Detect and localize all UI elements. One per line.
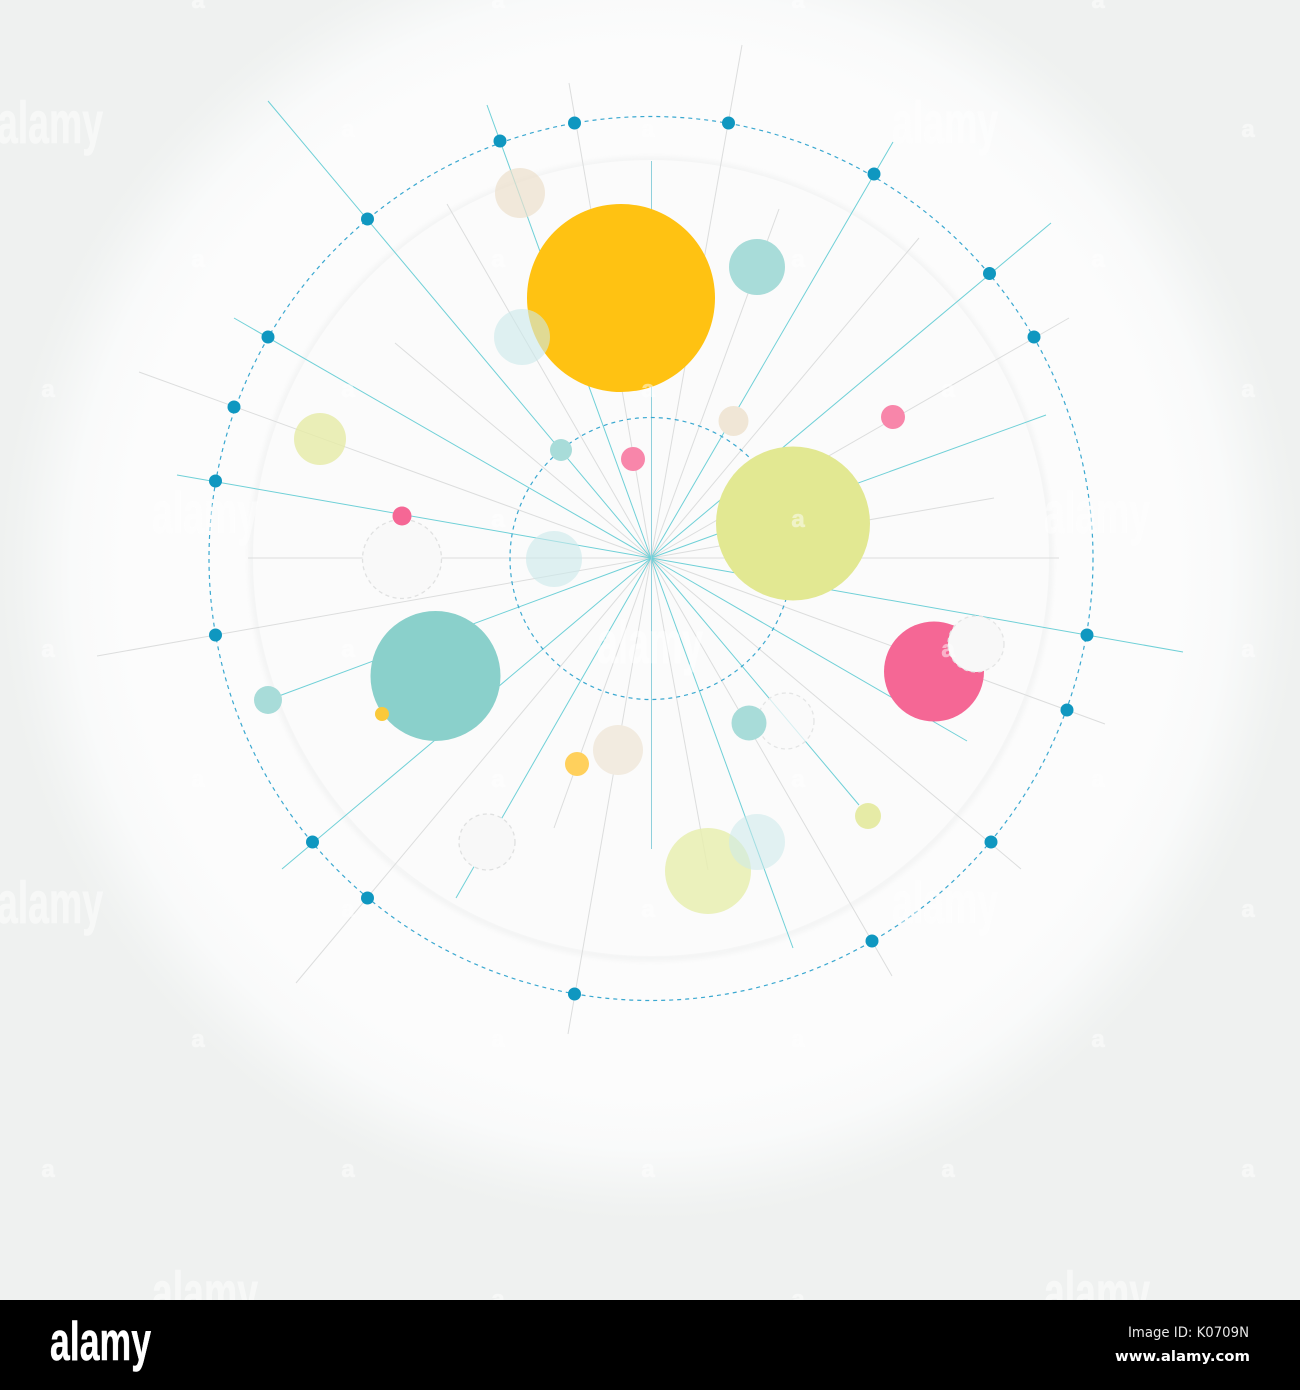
watermark text: a xyxy=(791,1026,805,1053)
beige circle top xyxy=(495,168,545,218)
watermark text: a xyxy=(191,766,205,793)
watermark text: a xyxy=(341,896,355,923)
watermark text: a xyxy=(191,1026,205,1053)
watermark text: a xyxy=(791,506,805,533)
pink circle xyxy=(884,622,984,722)
watermark text: a xyxy=(1091,246,1105,273)
watermark text: a xyxy=(791,1286,805,1313)
teal radial lines xyxy=(177,101,1183,948)
watermark text: a xyxy=(1241,636,1255,663)
watermark text: a xyxy=(641,1156,655,1183)
watermark text: a xyxy=(491,506,505,533)
watermark text: a xyxy=(491,1026,505,1053)
inner dashed ring xyxy=(510,418,792,700)
watermark text: a xyxy=(41,376,55,403)
pale blue circle bottom xyxy=(729,814,785,870)
dashed empty circle left xyxy=(362,520,442,598)
outer dashed ring xyxy=(209,116,1093,1000)
large lime circle xyxy=(716,446,870,600)
watermark text: a xyxy=(791,766,805,793)
watermark text: a xyxy=(41,1156,55,1183)
small pink circle right xyxy=(881,405,905,429)
watermark text: alamy xyxy=(152,480,258,546)
gray radial lines xyxy=(97,45,1105,1034)
pale blue circle centre xyxy=(526,531,582,587)
small lime circle xyxy=(855,803,881,829)
dashed empty circle bottom right xyxy=(758,693,814,749)
watermark text: a xyxy=(191,246,205,273)
watermark text: a xyxy=(941,376,955,403)
tiny yellow circle xyxy=(375,707,389,721)
watermark text: a xyxy=(1241,376,1255,403)
teal circle top right xyxy=(729,239,785,295)
dashed empty circle bottom left xyxy=(459,814,515,870)
watermark text: alamy xyxy=(0,90,103,156)
tiny pink circle left xyxy=(392,506,412,526)
footer bar: Image ID: K0709N xyxy=(1128,1325,1249,1341)
watermark text: a xyxy=(791,246,805,273)
watermark text: a xyxy=(1091,766,1105,793)
watermark text: a xyxy=(491,1286,505,1313)
watermark text: a xyxy=(1241,116,1255,143)
watermark text: a xyxy=(941,636,955,663)
watermark text: a xyxy=(491,246,505,273)
ring nodes xyxy=(209,116,1094,1000)
small beige circle xyxy=(718,406,748,436)
watermark text: alamy xyxy=(597,610,703,676)
middle ring with soft shadow xyxy=(252,160,1050,958)
small teal circle left xyxy=(254,686,282,714)
watermark text: a xyxy=(341,636,355,663)
watermark text: a xyxy=(1241,896,1255,923)
watermark text: a xyxy=(341,1156,355,1183)
footer bar xyxy=(0,1300,1300,1390)
small yellow circle bottom xyxy=(565,752,589,776)
watermark text: alamy xyxy=(1044,480,1150,546)
watermark text: alamy xyxy=(0,870,103,936)
watermark text: a xyxy=(341,376,355,403)
watermark text: alamy xyxy=(892,870,998,936)
footer bar: alamy xyxy=(50,1310,151,1372)
lime circle left xyxy=(294,413,346,465)
footer bar: www.alamy.com xyxy=(1115,1349,1250,1365)
watermark text: a xyxy=(41,636,55,663)
watermark text: a xyxy=(641,896,655,923)
watermark text: alamy xyxy=(892,90,998,156)
watermark text: a xyxy=(1241,1156,1255,1183)
watermark text: alamy xyxy=(1044,1260,1150,1326)
small pink circle centre xyxy=(621,447,645,471)
large teal circle xyxy=(370,611,500,741)
watermark text: a xyxy=(491,766,505,793)
beige circle bottom xyxy=(593,725,643,775)
watermark text: a xyxy=(641,376,655,403)
watermark text: a xyxy=(341,116,355,143)
watermark text: a xyxy=(941,1156,955,1183)
vertical axis line xyxy=(650,161,652,849)
white dashed circle over pink xyxy=(948,616,1004,672)
lime circle bottom xyxy=(665,828,751,914)
teal circle bottom right xyxy=(732,706,766,740)
large yellow circle xyxy=(527,204,715,392)
small teal circle centre xyxy=(550,439,572,461)
watermark text: alamy xyxy=(152,1260,258,1326)
pale blue circle over yellow xyxy=(494,309,550,365)
watermark text: a xyxy=(1091,1026,1105,1053)
watermark text: a xyxy=(641,116,655,143)
